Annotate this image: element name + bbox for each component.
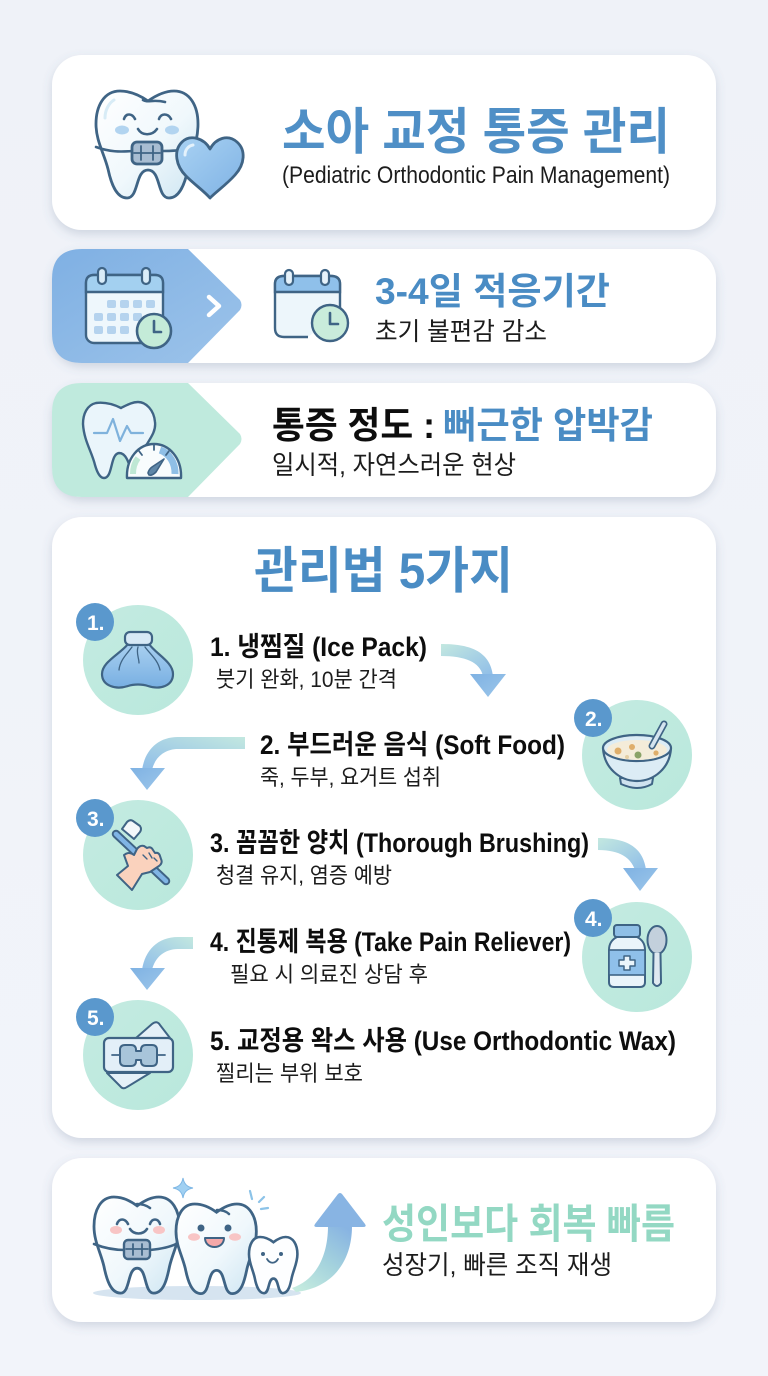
step 3: brushing	[76, 799, 589, 910]
icon: tooth with gauge	[83, 402, 181, 478]
step 1: ice pack	[76, 603, 427, 715]
step 2: soft food: 2.	[585, 708, 603, 731]
heading: care methods: 관리법 5가지	[254, 543, 513, 599]
text: step 2 heading: 2. 부드러운 음식 (Soft Food)	[260, 730, 565, 760]
step 2: soft food	[260, 699, 692, 810]
small tooth	[249, 1237, 297, 1293]
sparkle	[173, 1178, 193, 1198]
icon: wax strip with bracket	[104, 1022, 173, 1088]
icon: tooth with braces and heart	[96, 91, 243, 198]
arrow: step 4 to 5	[130, 937, 193, 990]
text: step 4 heading: 4. 진통제 복용 (Take Pain Reliever)	[210, 927, 571, 957]
text: step 5 heading: 5. 교정용 왁스 사용 (Use Orthodontic Wax)	[210, 1026, 676, 1056]
text: step 4 detail: 필요 시 의료진 상담 후	[230, 962, 428, 987]
icon: medicine bottle and spoon	[609, 925, 666, 987]
panel: five care methods	[52, 517, 716, 1138]
step 3: brushing: 3.	[87, 808, 105, 831]
icon: calendar with clock	[275, 270, 348, 341]
panel: pain level	[52, 383, 716, 497]
tooth with braces	[94, 1197, 179, 1293]
icon: chevron	[209, 297, 219, 315]
panel: faster recovery	[52, 1158, 716, 1322]
text: adaptation description: 초기 불편감 감소	[375, 318, 547, 346]
text: step 1 detail: 붓기 완화, 10분 간격	[216, 667, 397, 692]
text: step 5 detail: 찔리는 부위 보호	[216, 1061, 363, 1086]
text: step 2 detail: 죽, 두부, 요거트 섭취	[260, 765, 441, 790]
panel: title	[52, 55, 716, 230]
icon: hand with toothbrush	[116, 820, 166, 890]
arrow: upward recovery	[292, 1193, 366, 1292]
heading: pain level: 통증 정도 :	[272, 405, 435, 446]
heading: adaptation: 3-4일 적응기간	[375, 271, 610, 312]
arrow tab: blue	[52, 249, 242, 363]
text: step 3 detail: 청결 유지, 염증 예방	[216, 863, 392, 888]
text: step 3 heading: 3. 꼼꼼한 양치 (Thorough Brushing)	[210, 828, 589, 858]
step 4: pain reliever: 4.	[585, 908, 603, 931]
text: pain description: 일시적, 자연스러운 현상	[272, 450, 516, 480]
shine lines	[250, 1191, 268, 1209]
arrow tab: mint	[52, 383, 242, 497]
step 4: pain reliever	[210, 899, 692, 1012]
icon: calendar with clock on tab	[86, 268, 171, 348]
icon: porridge bowl	[603, 724, 671, 788]
panel: adaptation period	[52, 249, 716, 363]
arrow: step 2 to 3	[130, 737, 245, 790]
heading: faster recovery: 성인보다 회복 빠름	[382, 1201, 675, 1247]
arrow: step 3 to 4	[598, 838, 658, 891]
heading: title: 소아 교정 통증 관리	[282, 104, 670, 160]
icon: ice pack	[102, 632, 173, 688]
subtitle: (Pediatric Orthodontic Pain Management)	[282, 162, 670, 189]
text: recovery description: 성장기, 빠른 조직 재생	[382, 1250, 612, 1280]
step 5: orthodontic wax	[76, 998, 676, 1110]
heading: pain level	[272, 405, 653, 446]
icon: family of teeth	[93, 1178, 301, 1300]
arrow: step 1 to 2	[441, 644, 506, 697]
heading: pain level: 뻐근한 압박감	[443, 405, 653, 446]
step 5: orthodontic wax: 5.	[87, 1007, 105, 1030]
smiling tooth	[176, 1204, 256, 1294]
text: step 1 heading: 1. 냉찜질 (Ice Pack)	[210, 632, 427, 662]
step 1: ice pack: 1.	[87, 612, 105, 635]
